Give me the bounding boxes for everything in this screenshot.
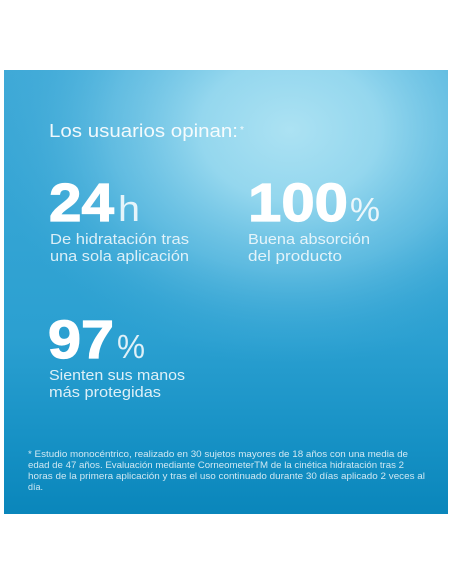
footnote: día. (28, 482, 43, 493)
stat: 97% (48, 310, 145, 370)
stat: 97%: % (117, 328, 145, 365)
text: 100% description: del producto (248, 248, 342, 265)
panel: blue background (4, 70, 448, 514)
text: 100% description: Buena absorción (248, 231, 370, 248)
text: 97% description (49, 367, 185, 401)
footnote: * Estudio monocéntrico, realizado en 30 sujetos mayores de 18 años con una media de (28, 449, 408, 460)
text: 24h description (50, 231, 189, 265)
stat: 97%: 97 (48, 310, 114, 370)
stat: 100%: 100 (248, 173, 348, 233)
footnote: edad de 47 años. Evaluación mediante CorneometerTM de la cinética hidratación tras 2 (28, 460, 404, 471)
text: 24h description: una sola aplicación (50, 248, 189, 265)
text: 100% description (248, 231, 370, 265)
footnote (28, 449, 425, 493)
stat: 24h: 24 (49, 173, 114, 233)
stat: 100%: % (350, 191, 380, 228)
stat: 24h (49, 173, 140, 233)
stat: 100% (248, 173, 380, 233)
text: 97% description: Sienten sus manos (49, 367, 185, 384)
stat: 24h: h (118, 188, 140, 229)
text: 24h description: De hidratación tras (50, 231, 189, 248)
text: 97% description: más protegidas (49, 384, 161, 401)
heading: Los usuarios opinan: (49, 120, 238, 141)
heading: * (240, 125, 244, 136)
footnote: horas de la primera aplicación y tras el uso continuado durante 30 días aplicado 2 veces al (28, 471, 425, 482)
